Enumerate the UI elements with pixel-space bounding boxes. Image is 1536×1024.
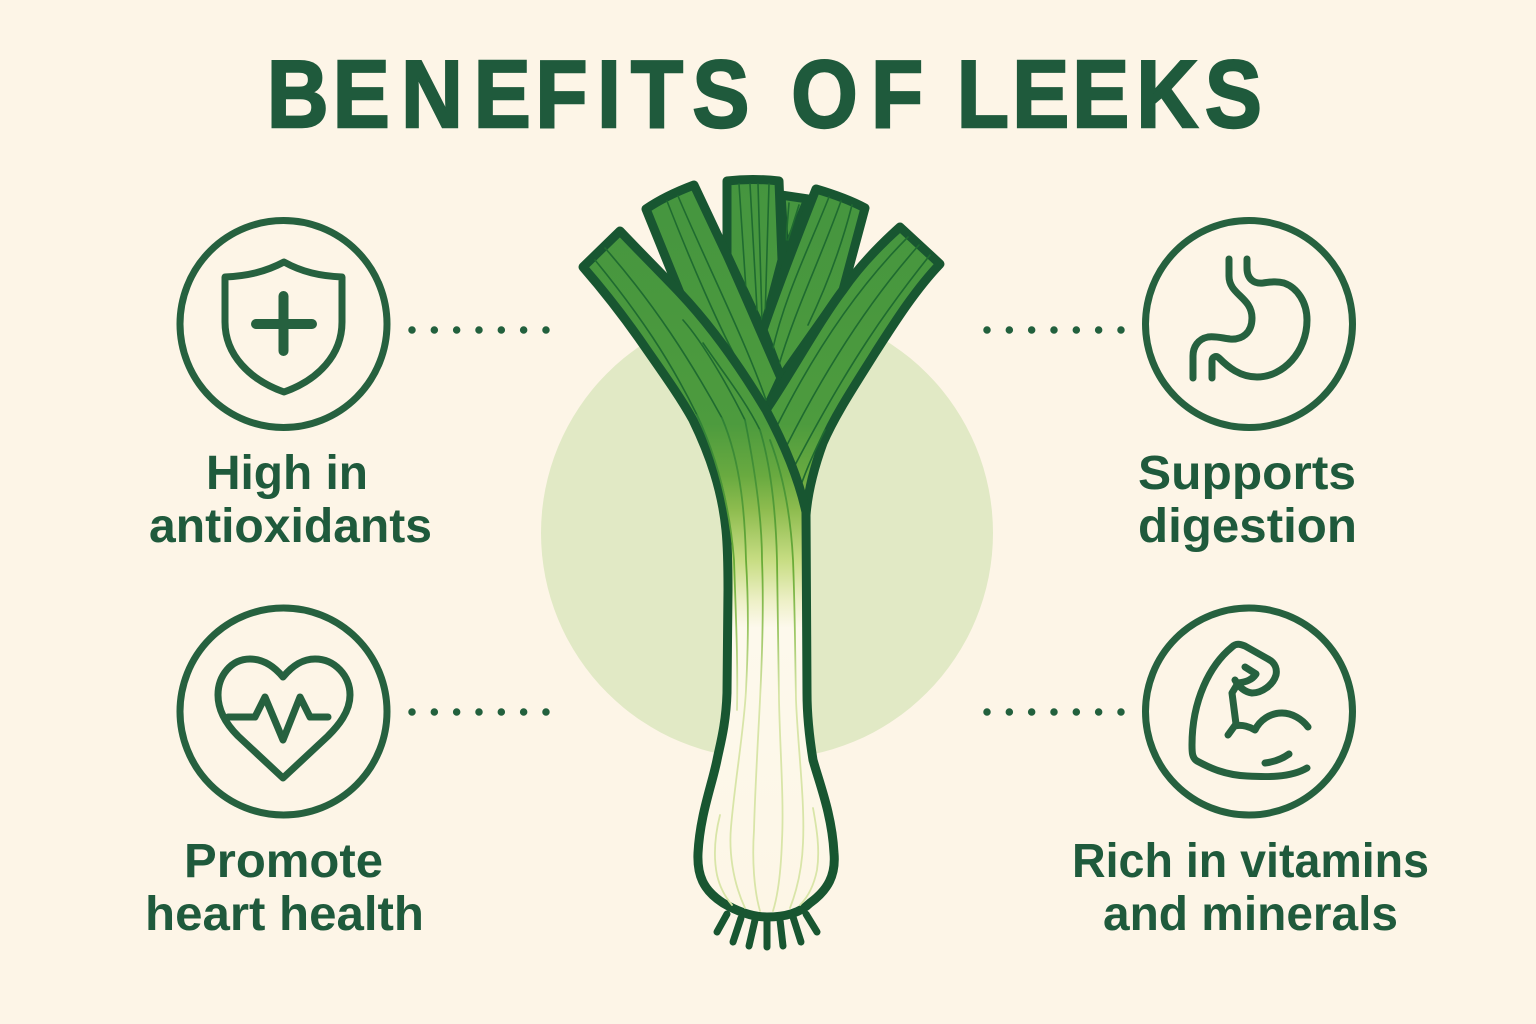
left inner leaf <box>646 185 781 410</box>
benefit: high in antioxidants <box>149 220 552 553</box>
pale green circle behind leek <box>541 307 993 759</box>
icon: flexed arm <box>1146 608 1352 815</box>
label: supports digestion: digestion <box>1138 500 1357 553</box>
label: promote heart health: Promote <box>184 835 383 888</box>
connector dots <box>987 708 1127 716</box>
right inner leaf <box>763 189 865 378</box>
connector dots <box>987 326 1127 334</box>
connector dots <box>412 326 552 334</box>
label: high in antioxidants: antioxidants <box>149 500 432 553</box>
benefit: promote heart health <box>145 608 552 941</box>
benefit: supports digestion <box>987 220 1357 553</box>
label: supports digestion: Supports <box>1138 447 1356 500</box>
benefit: rich in vitamins and minerals <box>987 608 1429 941</box>
leek illustration <box>583 180 940 947</box>
icon: heart with pulse <box>180 608 387 815</box>
icon: shield with plus <box>180 220 387 428</box>
left outer leaf and white stem <box>583 231 834 917</box>
back leaf <box>781 195 808 255</box>
title: BENEFITS OF LEEKS <box>267 41 1262 148</box>
label: rich in vitamins and minerals <box>1072 835 1429 941</box>
center leaf <box>727 180 782 332</box>
label: promote heart health <box>145 835 424 941</box>
label: supports digestion <box>1138 447 1357 553</box>
label: rich in vitamins and minerals: Rich in vitamins <box>1072 835 1429 888</box>
label: rich in vitamins and minerals: and minerals <box>1103 888 1398 941</box>
roots <box>717 914 817 947</box>
label: promote heart health: heart health <box>145 888 424 941</box>
label: high in antioxidants: High in <box>206 447 368 500</box>
label: high in antioxidants <box>149 447 432 553</box>
icon: stomach <box>1146 220 1352 428</box>
connector dots <box>412 708 552 716</box>
right outer leaf <box>766 227 940 515</box>
